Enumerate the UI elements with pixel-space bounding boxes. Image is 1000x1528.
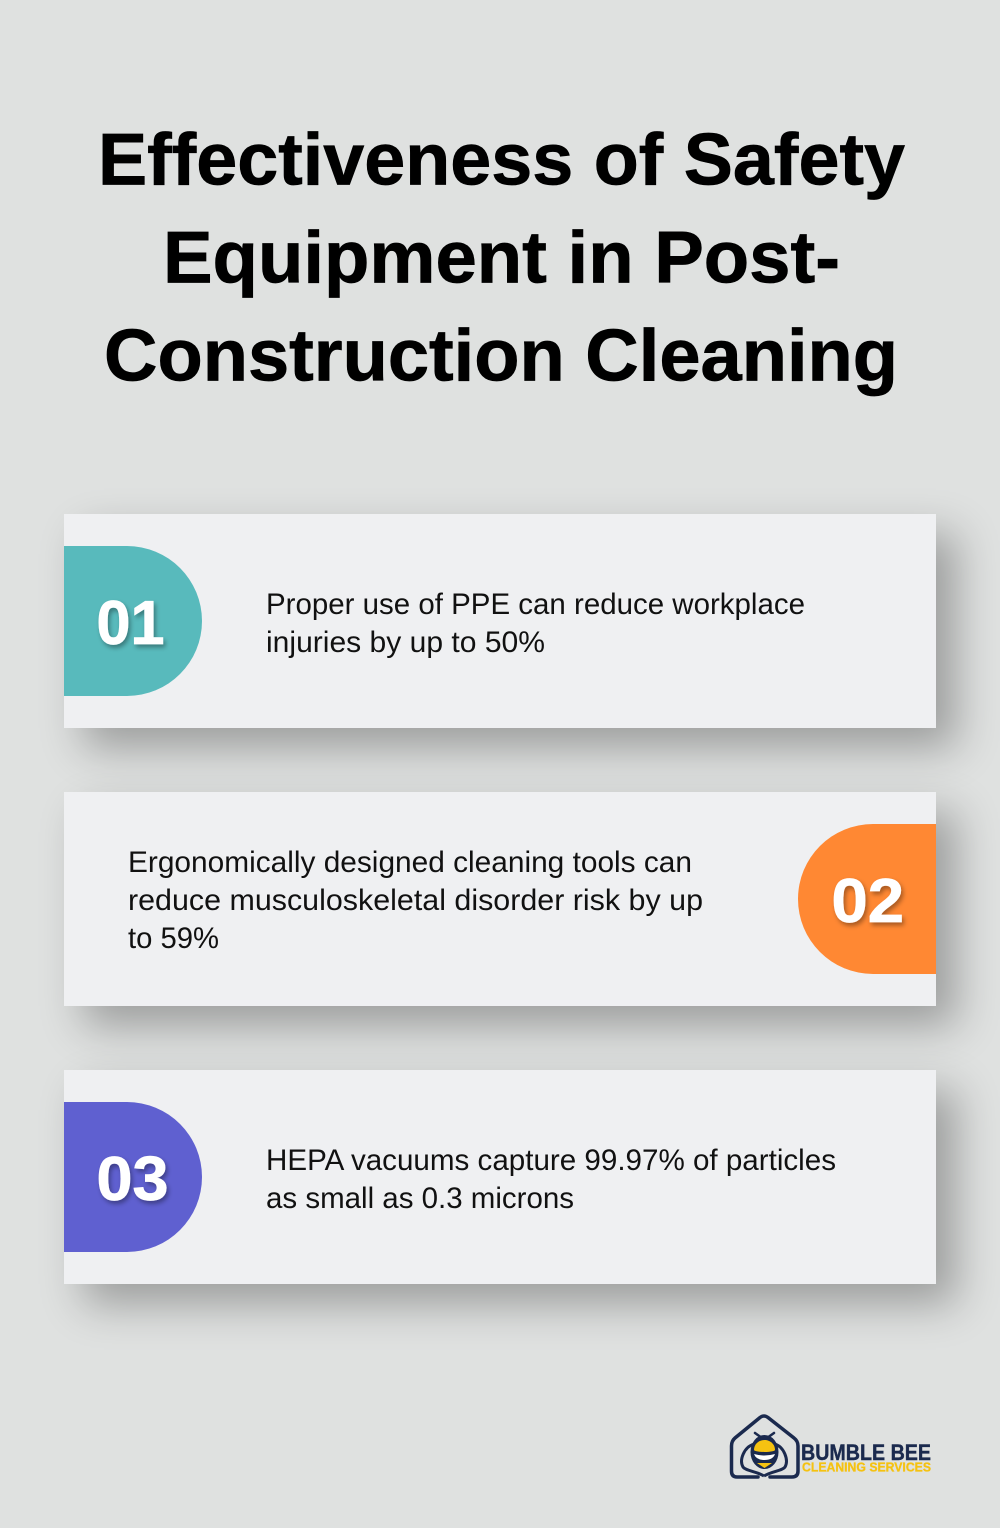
text: card 3 statement [266,1144,836,1215]
panel: card 1 background [64,514,936,728]
text: card 2 statement [128,846,703,955]
logo tagline: CLEANING SERVICES [802,1460,931,1474]
text: card 1 statement: injuries by up to 50% [266,626,545,659]
panel: card 2 background [64,792,936,1006]
icon: bee [742,1433,786,1476]
title: Equipment in Post- [163,218,840,298]
logo: Bumble Bee Cleaning Services [732,1416,931,1477]
badge: 01 [64,546,202,696]
badge: 02: 02 [832,867,904,936]
icon: house outline [732,1416,798,1477]
text: card 1 statement [266,588,805,659]
text: card 3 statement: as small as 0.3 microns [266,1182,574,1215]
logo wordmark: BUMBLE BEE [801,1440,931,1465]
text: card 1 statement: Proper use of PPE can reduce workplace [266,588,805,621]
badge: 03: 03 [96,1145,168,1214]
badge: 02 [798,824,936,974]
title: Construction Cleaning [104,316,898,396]
text: card 3 statement: HEPA vacuums capture 99.97% of particles [266,1144,836,1177]
text: card 2 statement: to 59% [128,922,219,955]
title [98,120,905,396]
badge: 01: 01 [96,589,164,658]
text: card 2 statement: Ergonomically designed cleaning tools can [128,846,692,879]
title: Effectiveness of Safety [98,120,905,200]
badge: 03 [64,1102,202,1252]
panel: card 3 background [64,1070,936,1284]
text: card 2 statement: reduce musculoskeletal disorder risk by up [128,884,703,917]
